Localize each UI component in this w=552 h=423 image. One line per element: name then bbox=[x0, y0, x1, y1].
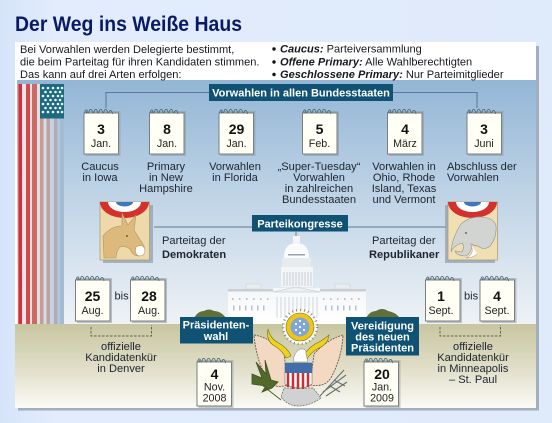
calendar: 4 Sept: 4 bbox=[493, 288, 501, 304]
calendar: 25 Aug: 25 bbox=[85, 288, 100, 304]
label: Super-Tuesday: Bundesstaaten bbox=[282, 194, 356, 206]
label: Vorwahlen in Florida: in Florida bbox=[212, 172, 259, 184]
calendar: 4 März: März bbox=[393, 138, 417, 150]
arrows bbox=[320, 370, 347, 396]
label: Kandidatenkür Denver: Kandidatenkür bbox=[85, 352, 157, 364]
calendar: 25 Aug bbox=[76, 276, 112, 323]
calendar: 25 Aug: Aug. bbox=[82, 305, 104, 317]
calendar: 5 Feb: Feb. bbox=[309, 138, 330, 150]
bracket: Minneapolis bbox=[440, 325, 500, 336]
illustration: Great Seal eagle bbox=[252, 310, 347, 406]
calendar: 20 Jan 2009: 20 bbox=[374, 366, 390, 382]
banner: Parteikongresse bbox=[252, 215, 348, 232]
label: Parteitag der Republikaner bbox=[369, 235, 440, 261]
connector: conventions line bbox=[154, 226, 446, 228]
primary types list: Geschlossene Primary: Nur Parteimitglieder bbox=[280, 69, 504, 81]
calendar: 4 Sept: Sept. bbox=[485, 305, 509, 317]
calendar: 20 Jan 2009: 2009 bbox=[370, 392, 394, 404]
calendar: 29 Jan: Jan. bbox=[226, 138, 247, 150]
box: Präsidentenwahl: Präsidenten- bbox=[183, 320, 250, 332]
label: Parteitag der Demokraten: Demokraten bbox=[162, 249, 226, 261]
intro text left: die beim Parteitag für ihren Kandidaten stimmen. bbox=[20, 56, 259, 68]
connector: primaries bracket bbox=[106, 92, 477, 108]
label: Parteitag der Demokraten: Parteitag der bbox=[162, 235, 226, 247]
calendar: 28 Aug: Aug. bbox=[138, 305, 160, 317]
calendar: 3 Jan: Jan. bbox=[91, 138, 111, 150]
olive branch bbox=[252, 360, 281, 400]
intro text left bbox=[20, 44, 259, 81]
calendar: 3 Juni: 3 bbox=[480, 121, 488, 137]
calendar: 8 Jan: 8 bbox=[163, 121, 171, 137]
calendar: 29 Jan: 29 bbox=[229, 121, 244, 137]
illustration: Capitol bbox=[228, 231, 366, 324]
calendar: 4 Nov 2008: 2008 bbox=[203, 392, 226, 404]
head bbox=[293, 349, 308, 362]
box: Präsidentenwahl bbox=[180, 317, 253, 344]
label: Kandidatenkür Minneapolis: offizielle bbox=[453, 341, 493, 353]
illustration: bushes left bbox=[194, 310, 226, 318]
wing left bbox=[254, 335, 288, 386]
label: Kandidatenkür Denver: offizielle bbox=[101, 341, 141, 353]
box: Vereidigung des neuen Präsidenten: des neuen bbox=[355, 332, 410, 344]
wing right bbox=[310, 335, 343, 386]
banner ribbon bbox=[268, 329, 291, 358]
label: Abschluss der Vorwahlen: Vorwahlen bbox=[447, 172, 499, 184]
calendar: 4 Nov 2008: 4 bbox=[211, 366, 219, 382]
calendar: 29 Jan bbox=[219, 109, 256, 156]
calendar: 4 Nov 2008 bbox=[197, 358, 234, 408]
calendar: 5 Feb: 5 bbox=[316, 121, 324, 137]
label: Super-Tuesday: „Super-Tuesday“ bbox=[278, 161, 360, 173]
primary types list: Caucus: Parteiversammlung bbox=[280, 44, 422, 56]
label: bis left: bis bbox=[114, 290, 129, 302]
label: Ohio, Rhode Island, Texas, Vermont: Vorwahlen in bbox=[372, 161, 436, 173]
illustration: bushes right bbox=[366, 309, 400, 318]
label: Parteitag der Republikaner: Parteitag der bbox=[372, 235, 436, 247]
horizon ground overlay bbox=[228, 324, 366, 326]
label: Vorwahlen in Florida: Vorwahlen bbox=[209, 161, 261, 173]
calendar: 3 Juni: Juni bbox=[474, 138, 494, 150]
calendar: 1 Sept bbox=[426, 276, 462, 323]
banner: Parteikongresse: Parteikongresse bbox=[257, 218, 343, 230]
label: Caucus in Iowa: Caucus bbox=[81, 161, 119, 173]
banner: Vorwahlen in allen Bundesstaaten: Vorwahlen in allen Bundesstaaten bbox=[212, 88, 390, 100]
calendar: 28 Aug bbox=[130, 276, 167, 323]
label: Kandidatenkür Minneapolis: – St. Paul bbox=[449, 374, 497, 386]
calendar: 3 Juni bbox=[467, 109, 504, 156]
box: Vereidigung des neuen Präsidenten: Vereidigung bbox=[351, 320, 414, 332]
label: Kandidatenkür Minneapolis: in Minneapolis bbox=[438, 363, 509, 375]
label: Kandidatenkür Denver: in Denver bbox=[97, 363, 145, 375]
box: Präsidentenwahl: wahl bbox=[203, 331, 228, 343]
crest bbox=[283, 310, 317, 344]
intro text left: Das kann auf drei Arten erfolgen: bbox=[20, 69, 182, 81]
label: Ohio, Rhode Island, Texas, Vermont: Island, Texas bbox=[372, 183, 437, 195]
label: Primary in New Hampshire: Primary bbox=[147, 161, 185, 173]
label: Super-Tuesday: Vorwahlen bbox=[293, 172, 345, 184]
calendar: 5 Feb bbox=[302, 109, 339, 156]
primary types list: Offene Primary: Alle Wahlberechtigten bbox=[280, 56, 472, 68]
label: Parteitag der Republikaner: Republikaner bbox=[369, 249, 440, 261]
calendar: 28 Aug: 28 bbox=[141, 288, 157, 304]
box: Vereidigung des neuen Präsidenten bbox=[346, 317, 419, 356]
calendar: 3 Jan: 3 bbox=[97, 121, 105, 137]
tail bbox=[281, 388, 321, 406]
label: Caucus in Iowa: in Iowa bbox=[82, 172, 118, 184]
label: Ohio, Rhode Island, Texas, Vermont: und Vermont bbox=[373, 194, 435, 206]
title: Der Weg ins Weiße Haus bbox=[15, 13, 242, 36]
label: Kandidatenkür Minneapolis: Kandidatenkür bbox=[437, 352, 509, 364]
label: bis right: bis bbox=[464, 290, 479, 302]
calendar: 4 März: 4 bbox=[401, 121, 409, 137]
shield bbox=[285, 363, 312, 389]
primary types list bbox=[272, 44, 504, 81]
bracket: Denver bbox=[91, 325, 152, 336]
calendar: 1 Sept: Sept. bbox=[429, 305, 453, 317]
calendar: 3 Jan bbox=[84, 109, 120, 156]
calendar: 8 Jan: Jan. bbox=[157, 138, 177, 150]
box: Vereidigung des neuen Präsidenten: Präsidenten bbox=[351, 342, 414, 354]
icon: american flag bbox=[18, 84, 64, 324]
calendar: 4 Sept bbox=[480, 276, 516, 323]
label: Super-Tuesday: in zahlreichen bbox=[285, 183, 353, 195]
calendar: 1 Sept: 1 bbox=[437, 288, 445, 304]
label: Primary in New Hampshire: Hampshire bbox=[139, 183, 193, 195]
calendar: 20 Jan 2009: Jan. bbox=[372, 382, 392, 394]
calendar: 4 März bbox=[388, 109, 424, 156]
label: Parteitag der Demokraten bbox=[162, 235, 226, 261]
banner: Vorwahlen in allen Bundesstaaten bbox=[209, 84, 393, 101]
calendar: 4 Nov 2008: Nov. bbox=[204, 382, 225, 394]
label: Abschluss der Vorwahlen: Abschluss der bbox=[447, 161, 517, 173]
calendar: 20 Jan 2009 bbox=[364, 358, 400, 408]
label: Primary in New Hampshire: in New bbox=[149, 172, 184, 184]
calendar: 8 Jan bbox=[150, 109, 186, 156]
poster: Democrats donkey bbox=[100, 202, 153, 263]
label: Ohio, Rhode Island, Texas, Vermont: Ohio, Rhode bbox=[373, 172, 435, 184]
intro text left: Bei Vorwahlen werden Delegierte bestimmt, bbox=[20, 44, 234, 56]
poster: Republicans elephant bbox=[445, 202, 498, 263]
